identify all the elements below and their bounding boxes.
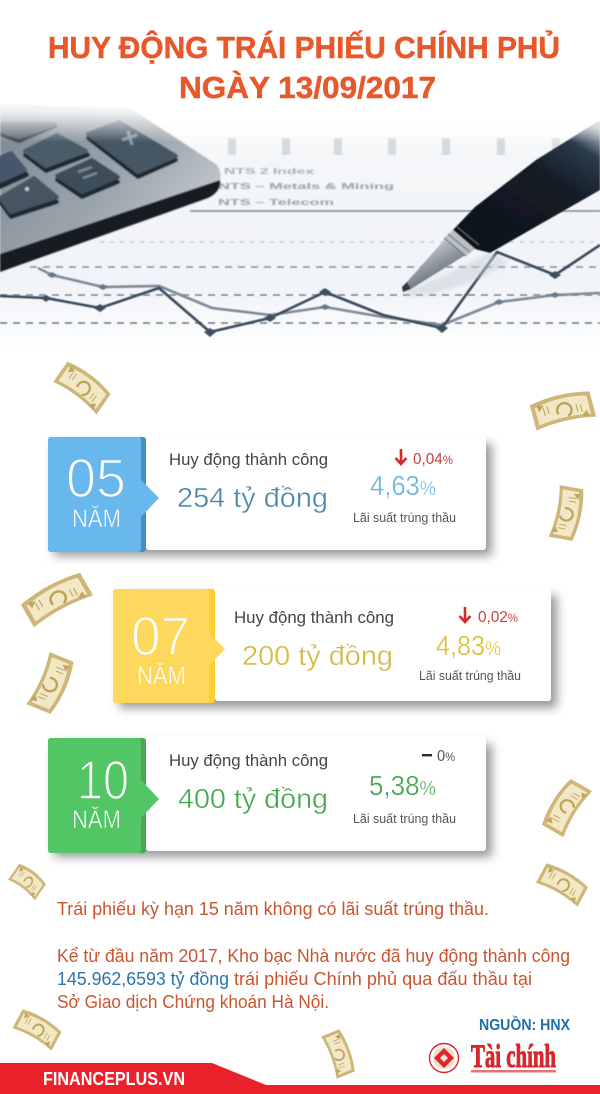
raised amount [169, 751, 328, 814]
interest rate change [422, 748, 455, 765]
raised amount: Huy động thành công [169, 450, 328, 469]
interest rate: Lãi suất trúng thầu [353, 511, 456, 525]
interest rate: Lãi suất trúng thầu [353, 812, 456, 826]
blurred table text: NTS 2 Index [224, 167, 315, 176]
interest rate [353, 770, 456, 826]
text block: notes: 145.962,6593 tỷ đồng [57, 968, 229, 989]
panel: 10-year bond [48, 736, 492, 857]
title: NGÀY 13/09/2017 [179, 70, 436, 105]
logo: Tài chính [430, 1039, 556, 1075]
raised amount [169, 450, 328, 513]
interest rate change: 0,04% [413, 451, 453, 468]
raised amount: Huy động thành công [234, 608, 394, 627]
raised amount: 400 tỷ đồng [178, 783, 328, 814]
calculator [0, 104, 220, 272]
grid lines [0, 211, 600, 323]
icon: banknote [529, 387, 596, 432]
interest rate change: 0,02% [478, 609, 518, 626]
chart lines [0, 245, 600, 332]
panel: 7-year bond [113, 587, 557, 708]
interest rate change: 0% [437, 748, 455, 765]
title [48, 29, 560, 105]
interest rate [419, 630, 521, 683]
years badge [72, 749, 129, 834]
years badge: 10 [77, 749, 129, 811]
text block: notes: Sở Giao dịch Chứng khoán Hà Nội. [57, 991, 329, 1012]
icon: banknote [52, 360, 113, 414]
interest rate: Lãi suất trúng thầu [419, 669, 521, 683]
blurred table text: NTS – Metals & Mining [218, 182, 394, 191]
icon: banknote [535, 861, 590, 907]
blurred table text [218, 138, 560, 207]
flying banknotes [7, 360, 596, 1079]
icon: banknote [549, 485, 586, 542]
source: NGUỒN: HNX [479, 1016, 571, 1034]
paper sheet [0, 122, 600, 348]
years badge: NĂM [72, 805, 121, 834]
pen [402, 121, 600, 296]
years badge: NĂM [137, 661, 186, 690]
icon: banknote [320, 1028, 358, 1079]
years badge: 05 [66, 447, 126, 509]
footer banner [0, 1063, 600, 1094]
interest rate [353, 470, 456, 525]
title: HUY ĐỘNG TRÁI PHIẾU CHÍNH PHỦ [48, 29, 560, 65]
years badge: 07 [131, 605, 190, 667]
text block: notes [57, 898, 570, 1012]
interest rate: 4,83% [436, 630, 501, 661]
raised amount: 200 tỷ đồng [242, 640, 393, 671]
chart markers [41, 271, 561, 337]
top fade over photo [0, 100, 600, 142]
interest rate change [396, 449, 453, 468]
raised amount: Huy động thành công [169, 751, 328, 770]
raised amount: 254 tỷ đồng [177, 482, 328, 513]
footer banner: FINANCEPLUS.VN [43, 1069, 185, 1089]
panel: 5-year bond [48, 435, 492, 556]
interest rate: 4,63% [370, 470, 436, 501]
text block: notes: trái phiếu Chính phủ qua đấu thầu tại [234, 968, 532, 989]
icon: banknote [12, 1007, 63, 1051]
blurred table text: NTS – Telecom [218, 198, 334, 207]
interest rate change [460, 607, 518, 626]
years badge: NĂM [72, 504, 121, 533]
interest rate: 5,38% [369, 770, 436, 801]
photo: calculator, pen and chart [0, 100, 600, 348]
icon: banknote [540, 777, 592, 838]
raised amount [234, 608, 394, 671]
icon: banknote [20, 569, 93, 629]
text block: notes: Kể từ đầu năm 2017, Kho bạc Nhà nước đã huy động thành công [57, 945, 570, 966]
icon: banknote [7, 862, 48, 900]
text block: notes: Trái phiếu kỳ hạn 15 năm không có lãi suất trúng thầu. [57, 898, 489, 919]
icon: banknote [26, 651, 76, 716]
